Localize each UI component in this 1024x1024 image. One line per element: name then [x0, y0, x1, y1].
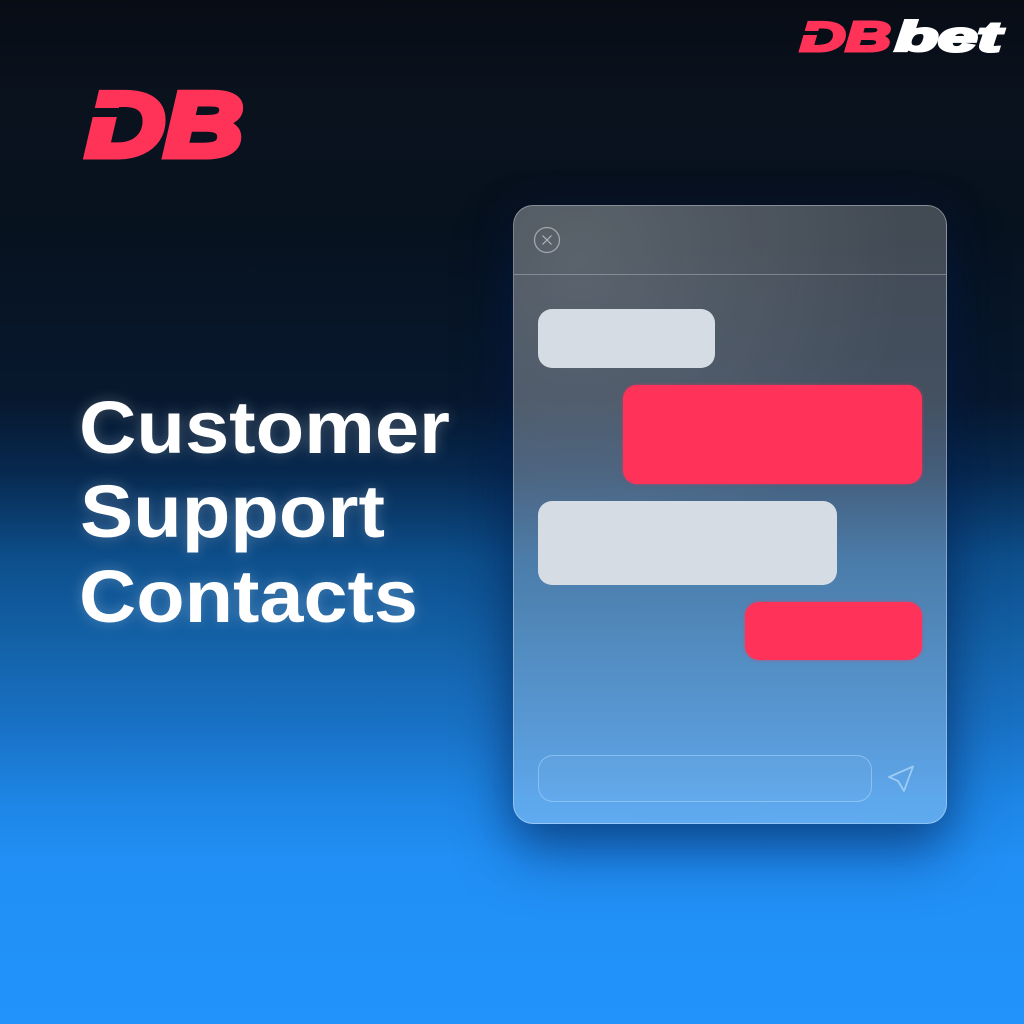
- icon: close button: [534, 226, 560, 254]
- header divider: [514, 274, 946, 275]
- title: Support: [80, 470, 385, 553]
- title: Contacts: [79, 555, 418, 638]
- logo: DBbet small: bet: [895, 13, 1004, 60]
- message bubble: grey wide: [538, 501, 837, 585]
- panel: chat window: [513, 205, 947, 824]
- logo: DBbet small: DB: [800, 13, 891, 60]
- message bubble: grey short: [538, 309, 715, 368]
- logo: DBbet small: [798, 13, 1006, 60]
- message bubble: red short: [745, 602, 922, 660]
- input field: [538, 755, 872, 802]
- message bubble: red large: [623, 385, 922, 484]
- icon: send: [888, 766, 914, 792]
- title: Customer: [79, 386, 450, 469]
- title: [76, 386, 452, 638]
